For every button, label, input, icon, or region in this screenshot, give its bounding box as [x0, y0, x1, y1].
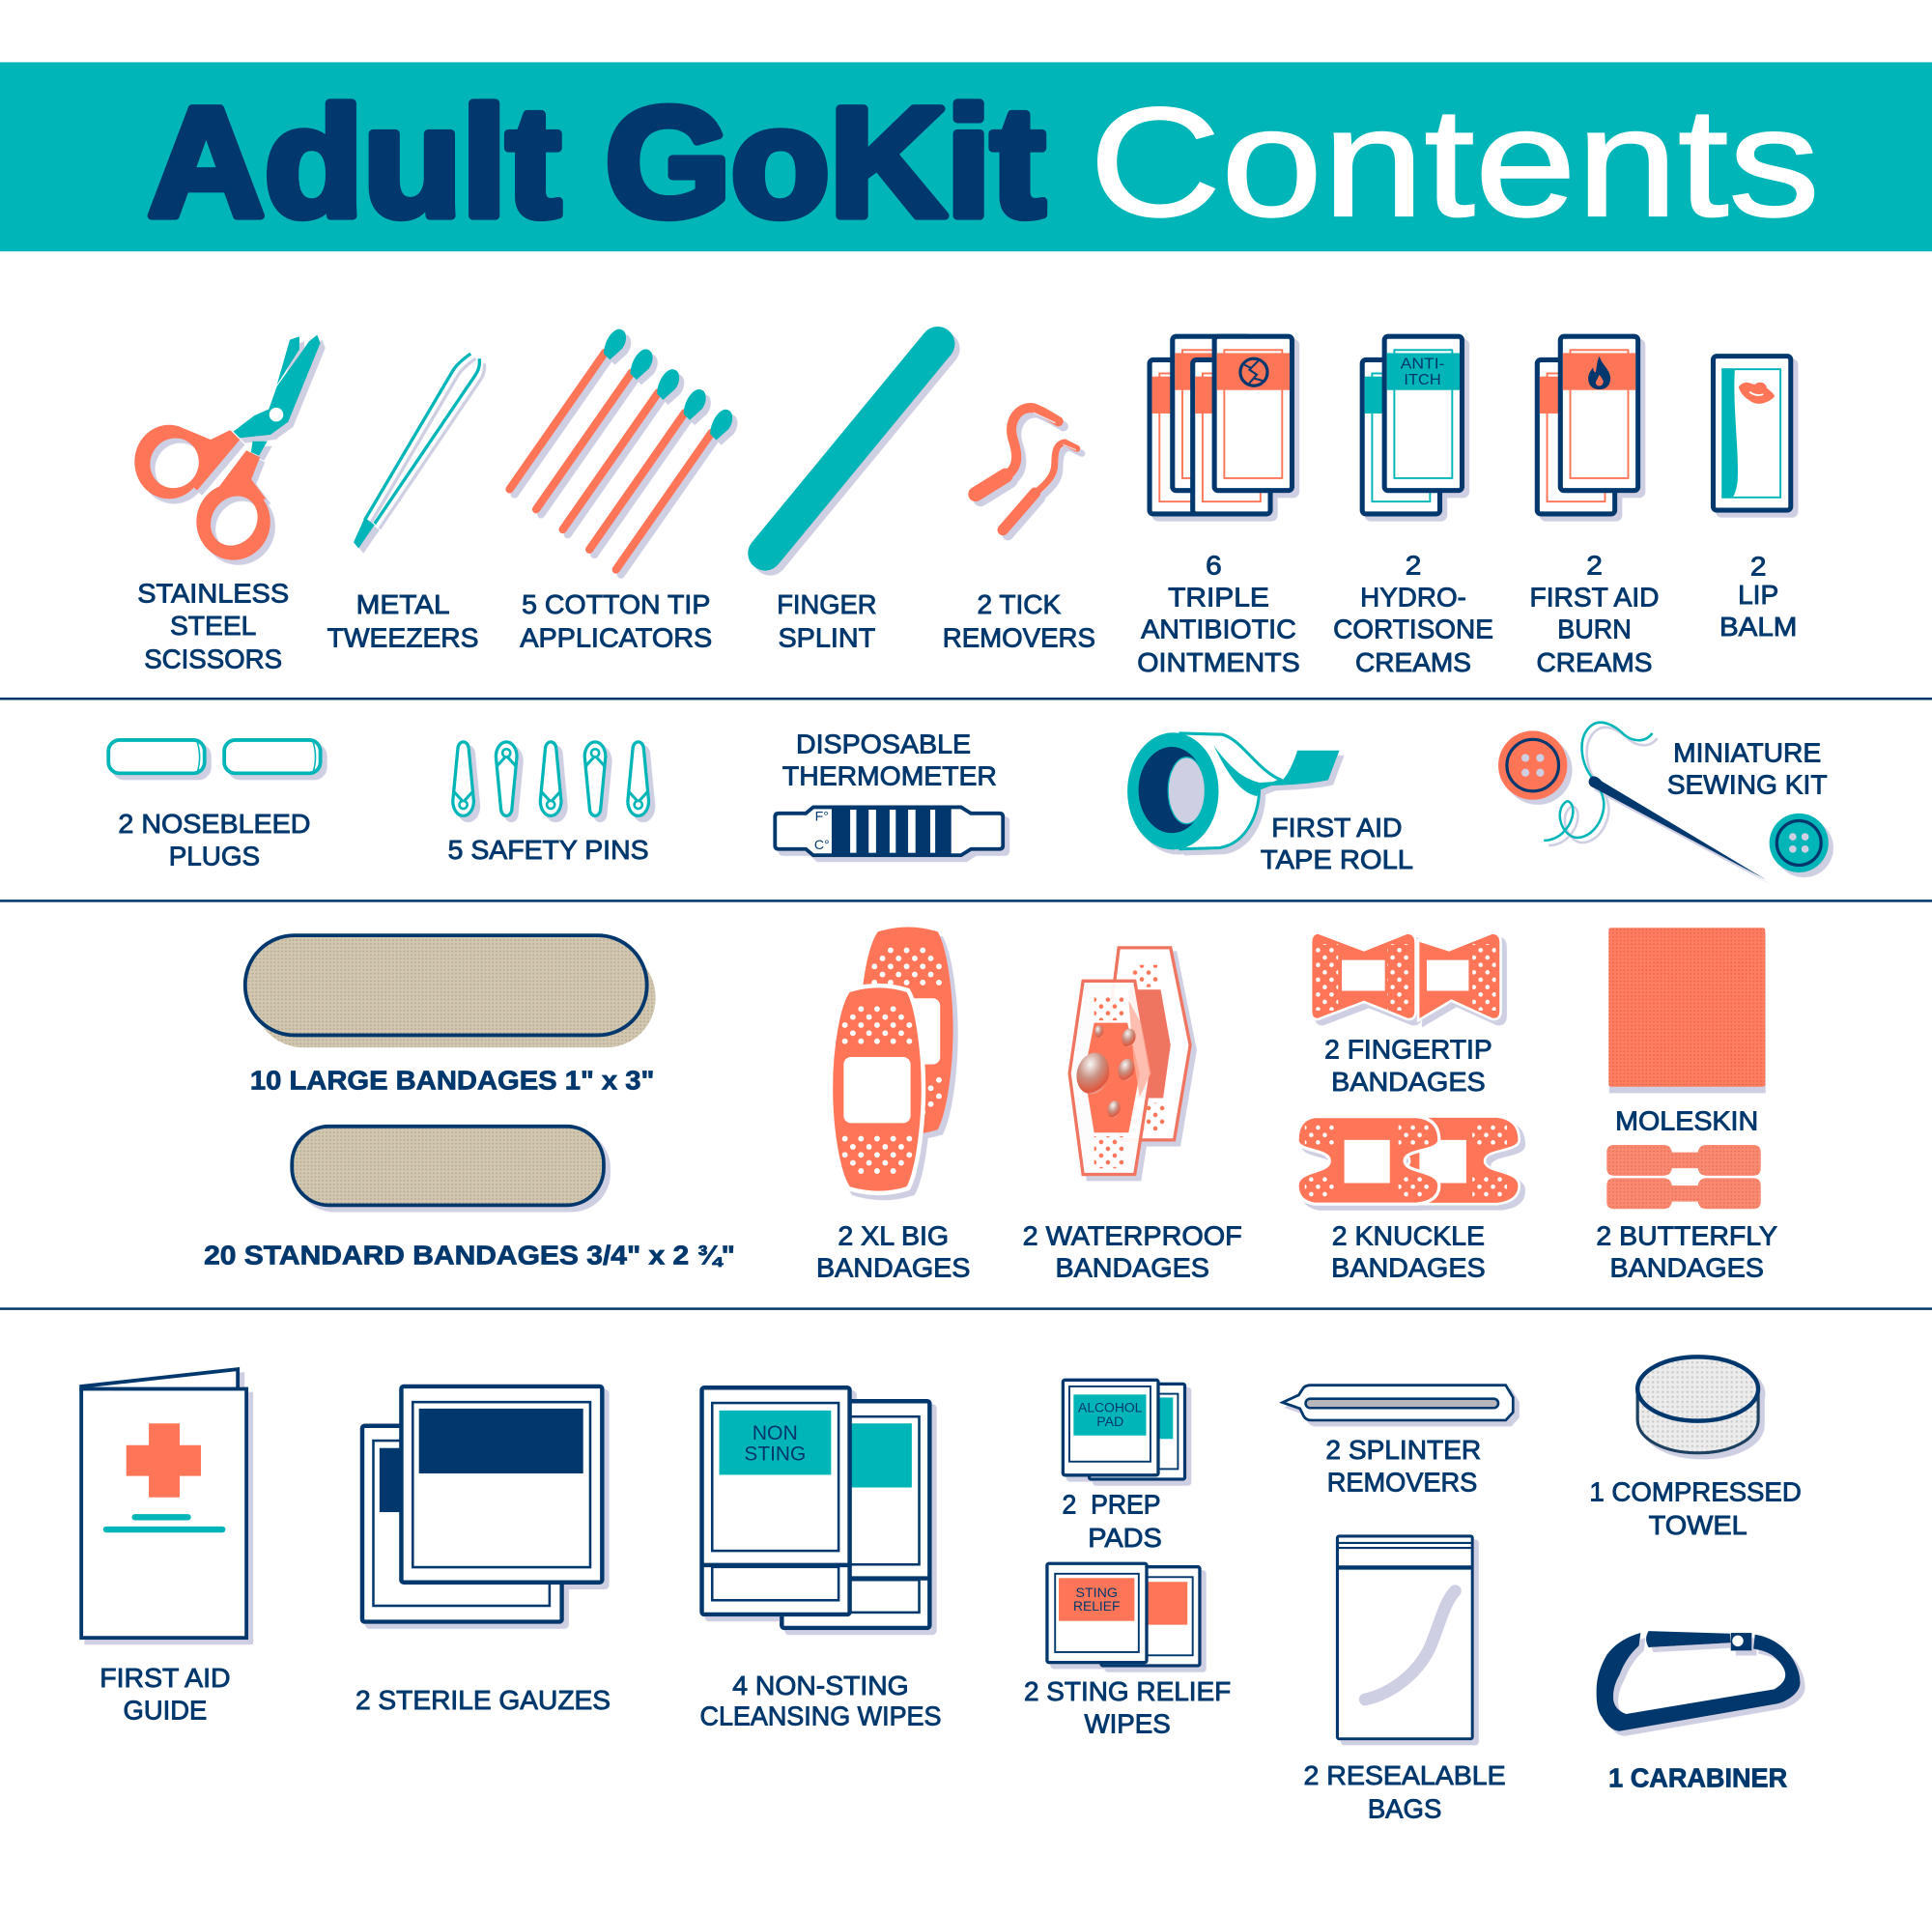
label: hydrocortisone — [1333, 550, 1493, 677]
label: sterile gauzes: 2 STERILE GAUZES — [355, 1685, 611, 1715]
label: splinter removers — [1325, 1435, 1481, 1497]
icon: carabiner — [1597, 1631, 1801, 1731]
label: triple antibiotic: OINTMENTS — [1137, 647, 1300, 677]
label: tweezers — [327, 589, 479, 653]
icon: scissors — [134, 335, 321, 560]
icon: triple antibiotic ointments — [1150, 336, 1293, 514]
icon: large bandages — [245, 935, 656, 1047]
icon: prep pads — [1063, 1380, 1185, 1479]
label: standard bandages: 20 STANDARD BANDAGES 3/4" x 2 ¾" — [204, 1241, 735, 1271]
label: waterproof bandages: 2 WATERPROOF — [1023, 1220, 1242, 1250]
label: tweezers: METAL — [356, 589, 450, 619]
label: moleskin: MOLESKIN — [1615, 1106, 1758, 1136]
label: finger splint: FINGER — [777, 589, 877, 619]
icon: sting relief wipes: STING — [1076, 1585, 1118, 1600]
label: burn creams: CREAMS — [1537, 647, 1652, 677]
label: tick removers: 2 TICK — [977, 589, 1061, 619]
label: knuckle bandages: 2 KNUCKLE — [1332, 1220, 1485, 1250]
label: cleansing wipes: CLEANSING WIPES — [699, 1701, 941, 1731]
label: thermometer: THERMOMETER — [782, 761, 997, 791]
icon: finger splint — [765, 344, 938, 554]
icon: thermometer: C° — [814, 837, 830, 852]
label: cleansing wipes — [699, 1671, 941, 1731]
label: tape roll: FIRST AID — [1271, 813, 1403, 843]
icon: XL big bandages — [831, 927, 953, 1193]
icon: fingertip bandages — [1311, 933, 1501, 1020]
label: triple antibiotic: TRIPLE — [1168, 583, 1269, 613]
icon: butterfly bandages — [1606, 1145, 1761, 1209]
label: XL bandages: 2 XL BIG — [838, 1220, 949, 1250]
label: XL bandages: BANDAGES — [816, 1252, 970, 1282]
label: safety pins: 5 SAFETY PINS — [448, 835, 649, 865]
label: first aid guide: FIRST AID — [99, 1663, 231, 1693]
label: nosebleed plugs — [118, 809, 310, 871]
label: triple antibiotic: 6 — [1206, 550, 1222, 580]
icon: prep pads: ALCOHOL — [1078, 1401, 1142, 1415]
label: scissors: STEEL — [170, 611, 256, 641]
icon: sterile gauzes — [362, 1386, 602, 1622]
label: large bandages: 10 LARGE BANDAGES 1" x 3" — [250, 1066, 654, 1096]
label: compressed towel — [1589, 1477, 1802, 1540]
label: nosebleed plugs: PLUGS — [169, 841, 260, 871]
icon: cotton tip applicators — [510, 329, 732, 570]
label: prep pads: 2 PREP — [1062, 1489, 1161, 1519]
label: carabiner: 1 CARABINER — [1608, 1762, 1787, 1792]
label: sting relief wipes: 2 STING RELIEF — [1024, 1676, 1231, 1706]
icon: non-sting cleansing wipes: NON — [753, 1420, 798, 1444]
label: hydrocortisone: CREAMS — [1355, 647, 1471, 677]
icon: safety pins — [453, 742, 649, 815]
label: finger splint: SPLINT — [778, 623, 875, 653]
label: tape roll: TAPE ROLL — [1261, 844, 1413, 874]
label: XL bandages — [816, 1220, 970, 1282]
label: hydrocortisone: 2 — [1406, 550, 1421, 580]
icon: thermometer: F° — [815, 808, 829, 823]
icon: knuckle bandages — [1297, 1117, 1520, 1204]
label: tick removers — [943, 589, 1095, 653]
label: hydrocortisone: CORTISONE — [1333, 614, 1493, 644]
label: tick removers: REMOVERS — [943, 623, 1095, 653]
icon: lip balm — [1713, 357, 1791, 510]
label: nosebleed plugs: 2 NOSEBLEED — [118, 809, 310, 839]
label: resealable bags — [1303, 1760, 1506, 1823]
icon: tweezers — [354, 354, 479, 549]
label: fingertip bandages: 2 FINGERTIP — [1324, 1035, 1492, 1065]
label: burn creams: 2 — [1586, 550, 1603, 580]
label: cleansing wipes: 4 NON-STING — [732, 1671, 909, 1700]
label: fingertip bandages: BANDAGES — [1331, 1067, 1486, 1097]
label: lip balm — [1719, 552, 1797, 642]
label: triple antibiotic: ANTIBIOTIC — [1141, 614, 1296, 644]
label: cotton tips: 5 COTTON TIP — [522, 589, 710, 619]
icon: tick removers — [976, 408, 1077, 529]
label: waterproof bandages — [1023, 1220, 1242, 1282]
title banner — [0, 62, 1932, 251]
icon: sting relief wipes — [1047, 1563, 1200, 1666]
label: tweezers: TWEEZERS — [327, 623, 479, 653]
label: prep pads — [1062, 1489, 1162, 1553]
label: fingertip bandages — [1324, 1035, 1492, 1097]
icon: burn creams — [1537, 336, 1638, 514]
title: Adult GoKit: Adult GoKit — [148, 76, 1045, 249]
label: burn creams: BURN — [1557, 614, 1632, 644]
label: sting relief wipes: WIPES — [1084, 1708, 1171, 1738]
label: compressed towel: TOWEL — [1649, 1510, 1747, 1540]
icon: splinter removers — [1283, 1386, 1513, 1420]
label: cotton tips — [520, 589, 712, 653]
label: cotton tips: APPLICATORS — [520, 623, 712, 653]
label: splinter removers: REMOVERS — [1327, 1467, 1477, 1497]
label: hydrocortisone: HYDRO- — [1360, 583, 1466, 613]
label: tape roll — [1261, 813, 1413, 874]
label: sting relief wipes — [1024, 1676, 1231, 1738]
label: scissors: SCISSORS — [144, 643, 282, 673]
icon: non-sting cleansing wipes — [702, 1387, 929, 1628]
label: first aid guide — [99, 1663, 231, 1725]
icon: waterproof bandages — [1069, 948, 1190, 1175]
label: burn creams — [1530, 550, 1659, 677]
label: butterfly bandages: 2 BUTTERFLY — [1596, 1220, 1777, 1250]
label: knuckle bandages: BANDAGES — [1331, 1252, 1486, 1282]
icon: hydrocortisone creams: ITCH — [1404, 372, 1441, 388]
label: sewing kit: MINIATURE — [1673, 737, 1821, 767]
label: burn creams: FIRST AID — [1530, 583, 1659, 613]
label: thermometer: DISPOSABLE — [796, 728, 971, 758]
label: first aid guide: GUIDE — [124, 1695, 207, 1725]
label: lip balm: 2 — [1750, 552, 1766, 582]
label: knuckle bandages — [1331, 1220, 1486, 1282]
label: triple antibiotic — [1137, 550, 1300, 677]
label: lip balm: LIP — [1738, 580, 1778, 610]
icon: tape roll — [1127, 732, 1339, 849]
label: scissors — [137, 579, 289, 673]
label: resealable bags: 2 RESEALABLE — [1303, 1760, 1506, 1790]
icon: prep pads: PAD — [1096, 1414, 1124, 1429]
label: butterfly bandages: BANDAGES — [1609, 1252, 1764, 1282]
icon: moleskin — [1608, 928, 1766, 1093]
label: butterfly bandages — [1596, 1220, 1777, 1282]
label: lip balm: BALM — [1719, 612, 1797, 642]
icon: compressed towel — [1637, 1357, 1758, 1453]
label: prep pads: PADS — [1088, 1523, 1162, 1553]
icon: thermometer — [775, 807, 1003, 855]
title: Contents: Contents — [1090, 76, 1820, 249]
label: thermometer — [782, 728, 997, 791]
icon: resealable bags — [1337, 1536, 1472, 1739]
icon: sting relief wipes: RELIEF — [1073, 1599, 1120, 1614]
icon: sewing kit — [1498, 723, 1829, 880]
label: splinter removers: 2 SPLINTER — [1325, 1435, 1481, 1465]
icon: hydrocortisone creams: ANTI- — [1401, 356, 1445, 372]
label: sewing kit — [1667, 737, 1828, 799]
icon: nosebleed plugs — [108, 740, 321, 773]
label: waterproof bandages: BANDAGES — [1055, 1252, 1209, 1282]
label: resealable bags: BAGS — [1368, 1793, 1441, 1823]
label: scissors: STAINLESS — [137, 579, 289, 609]
icon: hydrocortisone creams — [1362, 336, 1463, 514]
label: compressed towel: 1 COMPRESSED — [1589, 1477, 1802, 1507]
icon: standard bandages — [292, 1127, 604, 1205]
label: sewing kit: SEWING KIT — [1667, 769, 1828, 799]
icon: non-sting cleansing wipes: STING — [744, 1441, 806, 1465]
label: finger splint — [777, 589, 877, 653]
icon: first aid guide — [81, 1369, 246, 1638]
